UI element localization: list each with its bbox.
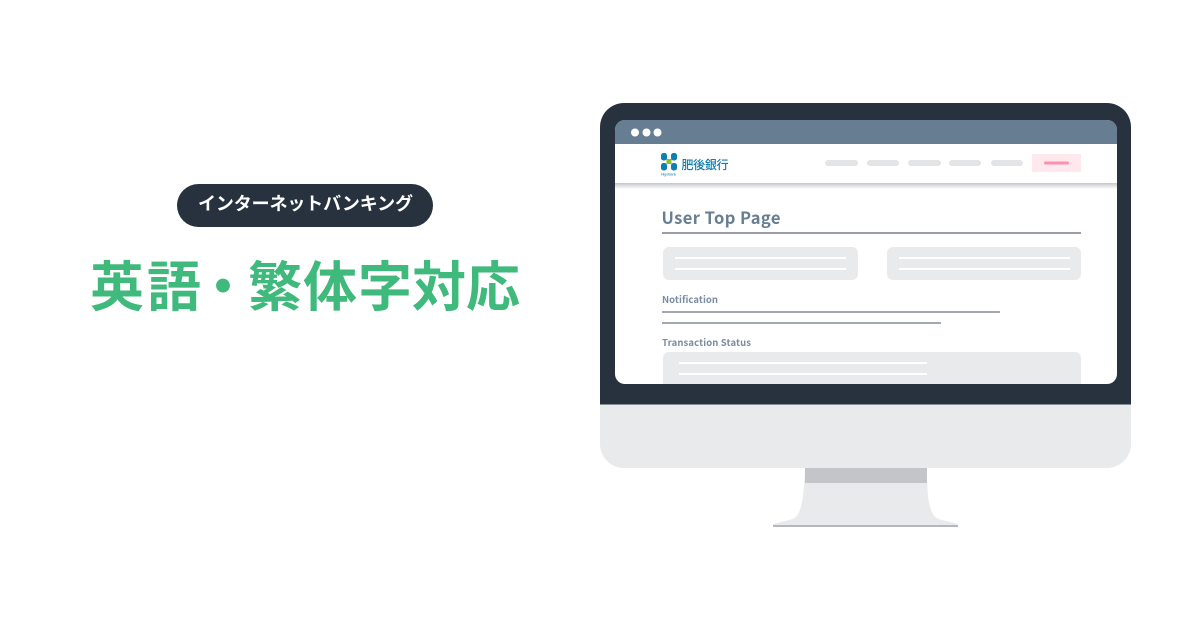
summary card left [663, 247, 858, 280]
monitor stand [773, 468, 958, 527]
illustration: desktop monitor [600, 103, 1131, 527]
summary card right [887, 247, 1081, 280]
bank logo: HigoBank [661, 172, 676, 176]
monitor chin [600, 404, 1131, 468]
page heading: User Top Page [662, 205, 780, 229]
browser bar [615, 120, 1117, 144]
screen [615, 120, 1117, 402]
transaction status section [662, 338, 1081, 384]
notification section: Notification [662, 292, 718, 306]
badge: internet banking [177, 184, 433, 227]
title: 英語・繁体字対応 [90, 243, 520, 322]
site header shadow [615, 183, 1117, 188]
monitor bezel [600, 103, 1131, 404]
nav button [1032, 154, 1081, 172]
bank logo: 肥後銀行 [682, 156, 728, 173]
transaction status section: Transaction Status [662, 335, 751, 349]
badge: internet banking: インターネットバンキング [198, 190, 413, 216]
nav items [825, 160, 1023, 166]
bank logo [661, 153, 728, 176]
